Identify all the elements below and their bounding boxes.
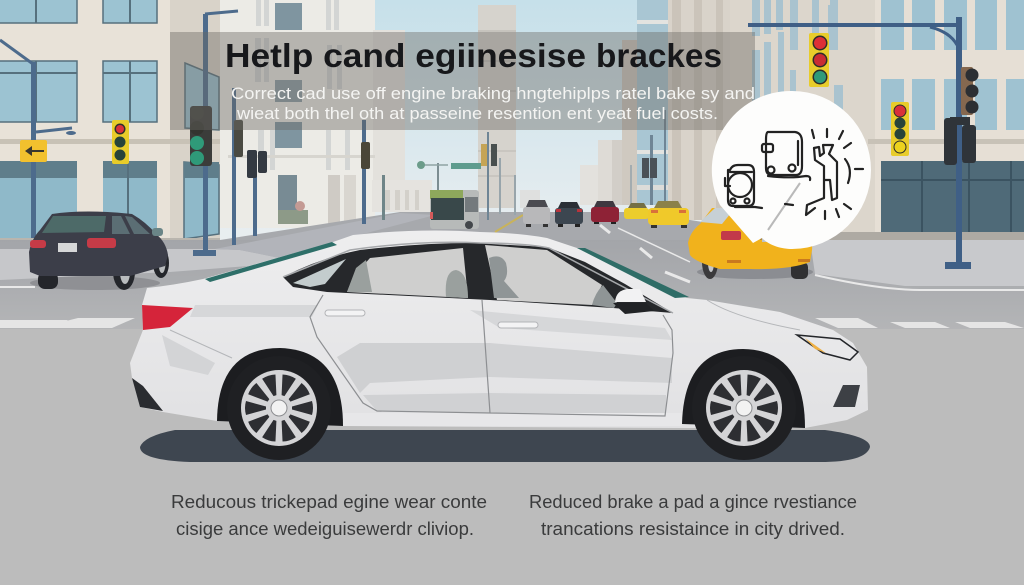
distant tower: [478, 5, 540, 208]
overhead signal red red green: [809, 33, 829, 87]
rear door glass: [347, 248, 468, 298]
fog lamp: [833, 385, 860, 407]
distant yellow cars: [624, 201, 689, 228]
left benefit text: [171, 492, 487, 539]
side mirror: [613, 289, 654, 314]
door seams: [310, 295, 673, 416]
title: Hetlp cand egiinesise: [225, 37, 586, 74]
right sidewalk: [810, 240, 1024, 286]
main left pole and signal: [190, 11, 238, 256]
rear wheel: [227, 356, 331, 460]
dark signals on right pole: [944, 67, 978, 165]
distant dark car: [555, 202, 583, 227]
hero white sedan: [130, 231, 868, 460]
headlight: [797, 335, 858, 360]
secondary street poles: [232, 88, 385, 245]
icon: bus: [762, 132, 810, 180]
road markings: [0, 215, 1024, 290]
left benefit text: Reducous trickepad egine wear conte: [171, 492, 487, 512]
parked dark hatchback: [29, 212, 169, 290]
body crease lines: [170, 300, 800, 358]
blue grey corner pavement: [215, 213, 435, 262]
front wheel arch: [682, 349, 805, 428]
centre-left white buildings: [220, 0, 432, 228]
crosswalk right: [815, 318, 1024, 328]
right benefit text: Reduced brake a pad a gince rvestiance: [529, 492, 857, 512]
intro paragraph: wieat both thel oth at passeine resention ent yeat fuel costs.: [236, 105, 718, 123]
far road: [220, 212, 815, 240]
wall signal red yellow: [891, 102, 909, 156]
traffic signal yellow left: [112, 120, 129, 164]
scrim band behind heading: [170, 32, 755, 130]
distant signals and street sign: [417, 110, 666, 220]
front wheel: [692, 356, 796, 460]
icon: small brake machine: [725, 165, 762, 208]
title: brackes: [596, 37, 722, 74]
hero car shadow: [140, 430, 870, 462]
rear quarter glass: [293, 259, 346, 287]
crosswalk left: [0, 318, 135, 328]
title: [225, 37, 722, 74]
front door glass: [485, 245, 602, 305]
rear bumper vent: [132, 378, 163, 411]
foreground pavement: [0, 329, 1024, 585]
tail light: [142, 305, 193, 330]
window frame: [283, 243, 673, 313]
door handles: [325, 310, 538, 328]
intro paragraph: [231, 85, 755, 123]
callout bubble with icons: [712, 91, 871, 249]
rear wheel arch: [217, 348, 343, 426]
icon: person with wrench and rays: [785, 129, 863, 219]
intro paragraph: Correct cad use off engine braking hngtehiplps ratel bake sy and: [231, 85, 755, 103]
left building: [0, 0, 220, 249]
sky: [0, 0, 1024, 240]
body shading: [162, 305, 682, 426]
distant red car: [591, 201, 619, 224]
distant silver car: [523, 200, 550, 227]
roof trim line: [283, 242, 673, 313]
far right buildings: [580, 0, 730, 220]
main right building: [730, 0, 1024, 241]
left sidewalk: [0, 249, 300, 280]
teal rear window strip: [205, 242, 337, 282]
teal windshield strip: [577, 248, 689, 298]
road surface: [0, 240, 1024, 330]
left traffic pole with arrow sign: [0, 40, 76, 238]
right overhead signal mast: [748, 17, 971, 269]
car body: [130, 231, 868, 428]
right benefit text: [529, 492, 857, 539]
distant green bus: [430, 190, 479, 229]
right benefit text: trancations resistaince in city drived.: [541, 519, 845, 539]
yellow taxi: [688, 208, 813, 279]
left benefit text: cisige ance wedeiguisewerdr cliviop.: [176, 519, 474, 539]
